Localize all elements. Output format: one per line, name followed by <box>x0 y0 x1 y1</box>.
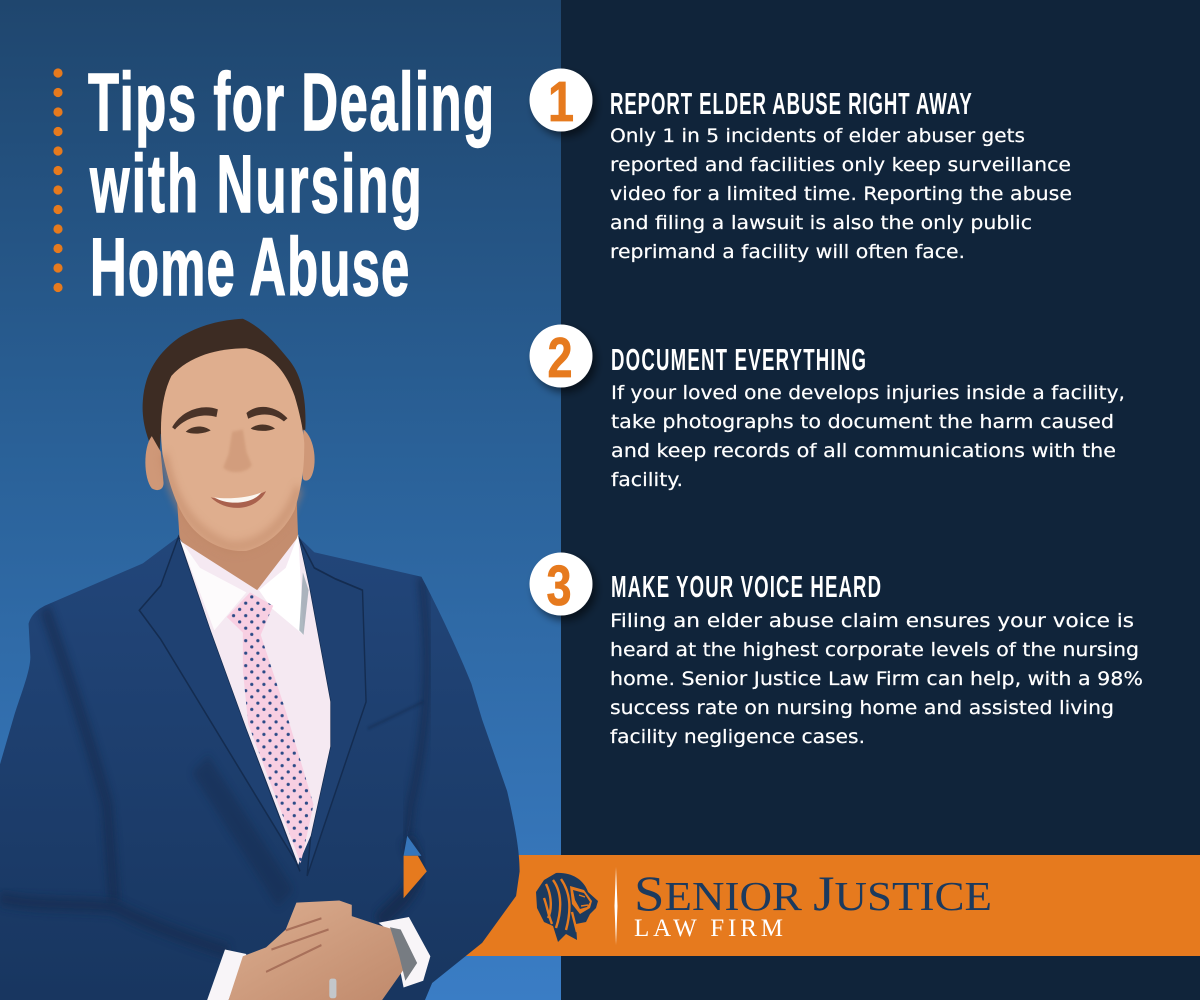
eyebrows <box>172 407 218 429</box>
body 3: home. Senior Justice Law Firm can help, with a 98% <box>610 668 1143 690</box>
panel: right navy background <box>561 0 1200 1000</box>
orange logo banner <box>403 855 1200 956</box>
body 2: and keep records of all communications with the <box>611 440 1116 462</box>
body 2: take photographs to document the harm caused <box>611 411 1114 433</box>
title: Tips for Dealing <box>88 57 494 148</box>
body 2: facility. <box>611 469 683 491</box>
suit jacket <box>0 537 520 1000</box>
arm gap showing banner <box>404 856 427 898</box>
hands <box>229 900 404 1000</box>
tip 2 <box>530 324 1125 491</box>
heading 1: REPORT ELDER ABUSE RIGHT AWAY <box>610 87 972 121</box>
photo: attorney in navy suit <box>0 319 520 1000</box>
finger lines <box>266 918 329 972</box>
title <box>88 57 494 313</box>
nose <box>223 429 252 472</box>
head: face <box>161 348 304 551</box>
ear right <box>302 429 315 481</box>
suit folds and shadows <box>0 577 427 952</box>
icon: lion head <box>536 873 598 942</box>
eyes <box>186 426 211 434</box>
number badge 3 <box>530 552 592 618</box>
body 1: reported and facilities only keep surveillance <box>610 154 1071 176</box>
body 3: facility negligence cases. <box>610 726 865 748</box>
body 1: and filing a lawsuit is also the only public <box>610 212 1032 234</box>
number badge 1 <box>530 68 592 134</box>
wedding ring <box>329 979 336 998</box>
number badge 2: 2 <box>548 326 572 390</box>
body 3 <box>610 610 1143 748</box>
body 1: Only 1 in 5 incidents of elder abuser gets <box>610 125 1025 147</box>
number badge 1: 1 <box>548 70 574 134</box>
watch <box>390 927 417 981</box>
body 2: If your loved one develops injuries inside a facility, <box>611 382 1125 404</box>
logo name: SENIOR JUSTICE <box>634 865 992 921</box>
hair <box>143 319 306 463</box>
title: Home Abuse <box>90 222 409 313</box>
left lapel <box>139 537 300 871</box>
tip 3 <box>530 552 1143 748</box>
body 1 <box>610 125 1072 263</box>
tie <box>227 592 314 863</box>
logo subtitle: LAW FIRM <box>634 915 783 942</box>
right lapel <box>298 537 366 876</box>
right cuff <box>379 917 430 988</box>
dotted orange line <box>53 68 63 292</box>
collar shadow <box>299 572 309 635</box>
number badge 2 <box>530 324 592 390</box>
body 3: success rate on nursing home and assisted living <box>610 697 1114 719</box>
neck <box>177 492 298 595</box>
number badge 3: 3 <box>546 554 572 618</box>
body 2 <box>611 382 1125 491</box>
collar left <box>180 539 246 630</box>
left cuff <box>207 950 246 1000</box>
title: with Nursing <box>89 139 422 230</box>
arm gap showing background <box>404 807 421 856</box>
body 1: reprimand a facility will often face. <box>610 241 965 263</box>
heading 2: DOCUMENT EVERYTHING <box>611 343 866 377</box>
ear left <box>145 436 164 490</box>
body 3: Filing an elder abuse claim ensures your voice is <box>610 610 1134 632</box>
face shading <box>164 454 299 547</box>
logo: Senior Justice Law Firm <box>536 865 992 945</box>
body 3: heard at the highest corporate levels of the nursing <box>610 639 1139 661</box>
body 1: video for a limited time. Reporting the abuse <box>610 183 1072 205</box>
shirt <box>180 537 330 865</box>
teeth <box>214 492 261 503</box>
mouth <box>211 491 266 508</box>
heading 3: MAKE YOUR VOICE HEARD <box>611 570 881 604</box>
panel: left blue background <box>0 0 561 1000</box>
logo divider <box>614 867 618 945</box>
tip 1 <box>530 68 1072 263</box>
collar right <box>259 534 304 635</box>
